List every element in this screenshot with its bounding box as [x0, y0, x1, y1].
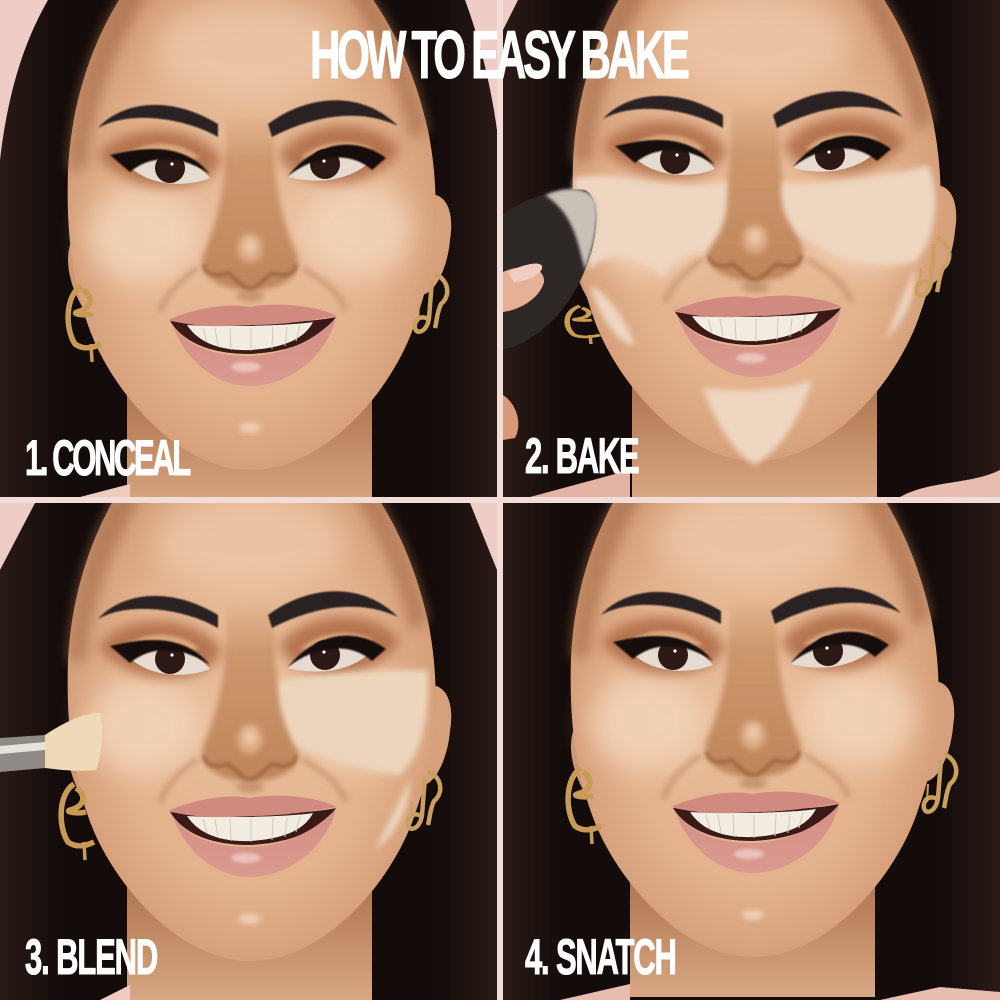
panel: step 1 conceal: [0, 0, 497, 510]
panel: step 3 blend: [0, 461, 497, 1000]
earring right: [917, 238, 949, 296]
step label: 1. conceal: 1. CONCEAL: [25, 429, 191, 486]
title: HOW TO EASY BAKE: [310, 17, 690, 92]
panel: step 2 bake: [503, 0, 1000, 501]
concealer patches: partly blended: [279, 670, 428, 850]
earrings: [568, 754, 956, 844]
step label: 4. snatch: 4. SNATCH: [525, 928, 677, 985]
icon: makeup sponge and hand: [503, 189, 597, 440]
step label: 2. bake: 2. BAKE: [525, 427, 640, 484]
panel: step 4 snatch: [503, 457, 1000, 1000]
earring left: [567, 306, 600, 344]
icon: blending brush: [0, 713, 102, 772]
earrings: [61, 771, 440, 860]
earrings: [68, 274, 447, 362]
concealer patches: baked powder: [574, 165, 935, 465]
step label: 3. blend: 3. BLEND: [25, 928, 158, 985]
